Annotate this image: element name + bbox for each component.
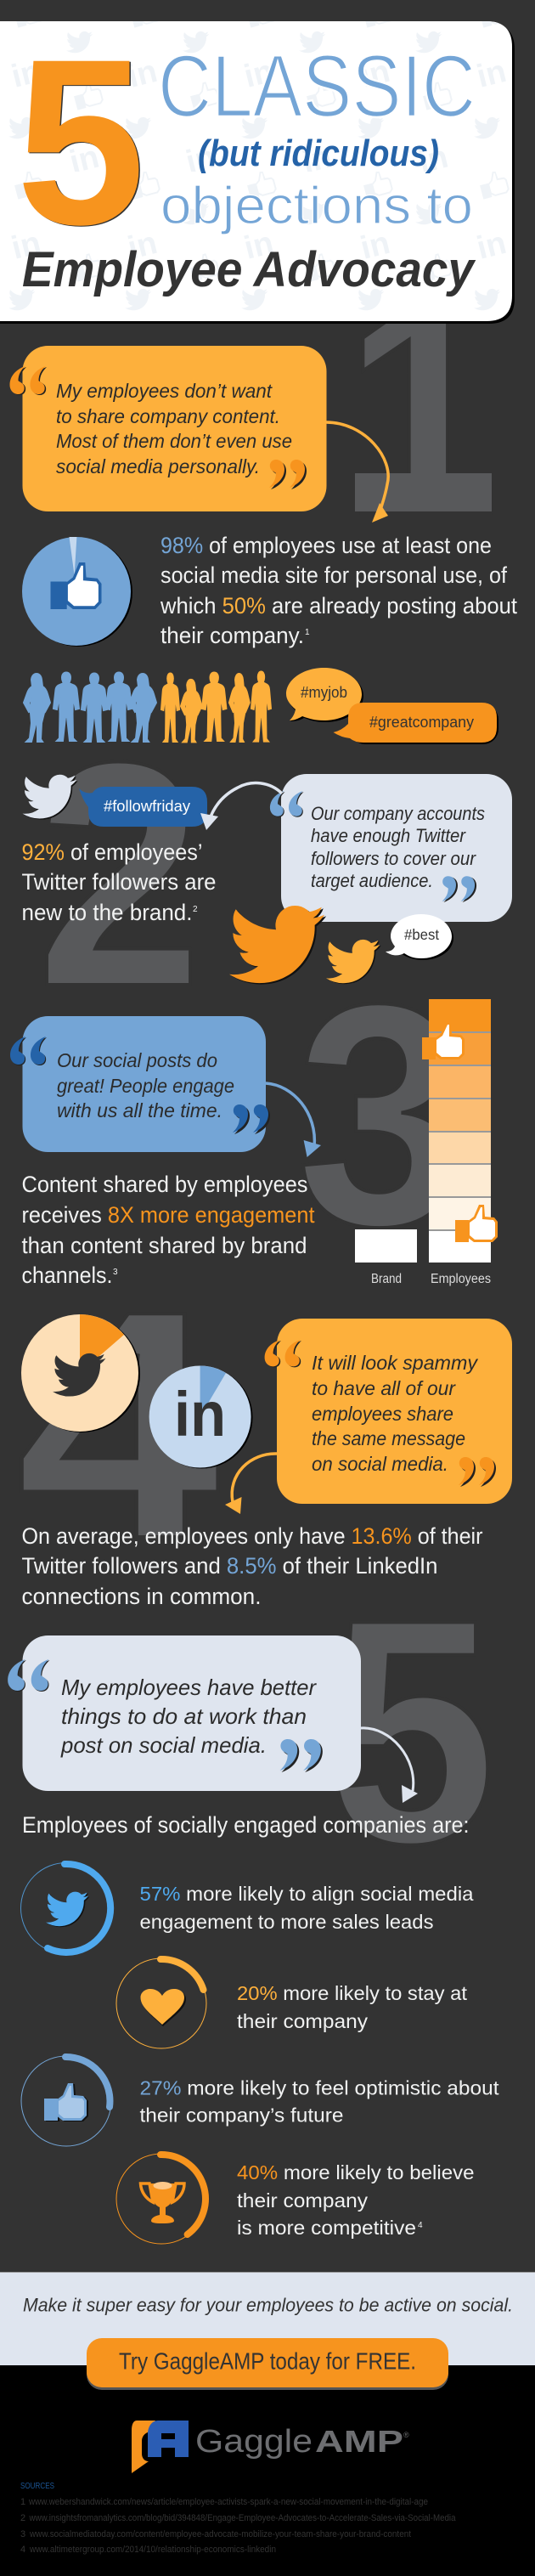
hashtag bubble best <box>386 914 453 960</box>
stat text 13.6%: connections in common. <box>22 1584 262 1609</box>
quote text <box>56 380 292 477</box>
sources <box>20 2481 456 2555</box>
text 40% <box>237 2161 474 2239</box>
sources: 4 <box>20 2545 25 2555</box>
header panel <box>0 9 515 324</box>
opening quote mark <box>270 791 304 817</box>
arrow from bubble 1 <box>326 422 388 523</box>
quote text <box>60 1675 317 1758</box>
stat text 98%: their company. <box>160 623 304 648</box>
closing quote mark <box>459 1457 496 1487</box>
stat text 92%: 2 <box>193 905 198 914</box>
closing quote mark <box>442 876 476 902</box>
section 3 quote bubble <box>10 1016 270 1152</box>
text 27%: 27% more likely to feel optimistic about <box>139 2076 499 2099</box>
text 20% <box>237 1982 467 2032</box>
stat text 8X: channels. <box>22 1263 112 1288</box>
axis label brand: Brand <box>371 1272 402 1286</box>
pie chart: linkedin 8.5% <box>149 1366 253 1468</box>
text 40%: their company <box>237 2189 368 2212</box>
quote text: Most of them don’t even use <box>56 430 292 452</box>
stat text 13.6%: Twitter followers and 8.5% of their LinkedIn <box>22 1553 438 1579</box>
text 57%: 57% more likely to align social media <box>139 1883 474 1905</box>
opening quote mark <box>265 1340 301 1367</box>
stat text 92%: new to the brand. <box>22 900 192 925</box>
sources: www.socialmediatoday.com/content/employee-advocate-mobilize-your-team-share-your-brand-content <box>29 2529 411 2539</box>
section 1 quote bubble <box>10 346 326 511</box>
hashtag bubble best: #best <box>404 926 439 943</box>
sources: www.insightsfromanalytics.com/blog/bid/394848/Engage-Employee-Advocates-to-Accelerate-Sales-via-Social-Media <box>29 2513 456 2523</box>
quote text: post on social media. <box>60 1732 267 1758</box>
quote text: with us all the time. <box>57 1099 222 1121</box>
ring 20% heart <box>116 1958 206 2048</box>
quote text: on social media. <box>312 1453 448 1475</box>
hashtag bubble myjob <box>286 668 363 722</box>
stat text 98%: 98% of employees use at least one <box>160 533 492 558</box>
hashtag bubble followfriday: #followfriday <box>104 797 191 815</box>
hashtag bubble greatcompany: #greatcompany <box>369 714 474 731</box>
CTA sentence: Make it super easy for your employees to be active on social. <box>23 2294 513 2316</box>
ring 40% trophy <box>116 2154 206 2244</box>
quote text: employees share <box>312 1403 453 1425</box>
brand bar <box>355 1229 417 1263</box>
opening quote mark <box>10 366 47 395</box>
big orange 5: 5 <box>16 9 145 274</box>
stat text 8X <box>22 1172 315 1288</box>
stat text 98%: social media site for personal use, of <box>160 562 507 588</box>
big number 5: 5 <box>329 1553 496 1910</box>
icon: thumb on brand top <box>422 1022 465 1059</box>
pie chart: linkedin 8.5%: in <box>174 1379 226 1449</box>
CTA button: Try GaggleAMP today for FREE. <box>119 2348 416 2374</box>
sources: SOURCES <box>20 2481 54 2491</box>
big orange 5: 5 <box>17 10 146 274</box>
ring 57% twitter <box>20 1862 112 1954</box>
quote text <box>312 1352 479 1475</box>
quote text: great! People engage <box>57 1075 234 1097</box>
icon: trophy <box>141 2182 184 2223</box>
stat text 8X: receives 8X more engagement <box>22 1202 315 1228</box>
CTA button <box>87 2338 448 2390</box>
stat text 13.6% <box>22 1523 483 1609</box>
title: Employee Advocacy: Employee Advocacy <box>22 242 476 297</box>
stat text 8X: than content shared by brand <box>22 1233 307 1258</box>
call to action band <box>0 2272 535 2365</box>
quote text: have enough Twitter <box>311 825 467 846</box>
quote text: It will look spammy <box>312 1352 479 1374</box>
quote text <box>57 1049 234 1121</box>
quote text: the same message <box>312 1427 465 1449</box>
text 57%: engagement to more sales leads <box>139 1911 433 1933</box>
employees bar <box>429 999 491 1263</box>
text 27% <box>139 2076 499 2126</box>
stat text 98% <box>160 533 517 648</box>
icon: small orange bird <box>326 940 381 984</box>
big number 4: 4 <box>16 1243 222 1606</box>
black footer background <box>0 2365 535 2576</box>
hashtag bubble myjob: #myjob <box>301 684 347 701</box>
intro line: Employees of socially engaged companies are: <box>22 1812 469 1838</box>
sources: 1 <box>20 2497 25 2507</box>
icon: thumbs up <box>51 562 102 609</box>
stat text 92%: Twitter followers are <box>22 869 216 895</box>
text 40%: is more competitive <box>237 2217 416 2239</box>
quote text: social media personally. <box>56 455 260 477</box>
arrow from bubble 2 <box>200 783 282 830</box>
stat text 8X: Content shared by employees <box>22 1172 307 1197</box>
ring 27% thumb <box>21 2056 111 2146</box>
quote text <box>311 803 485 891</box>
opening quote mark <box>8 1659 49 1692</box>
GaggleAMP logo: AMP <box>315 2424 403 2459</box>
section 5 quote bubble <box>8 1635 361 1791</box>
icon: white twitter bird <box>22 775 78 820</box>
icon: thumb on employees bar <box>455 1205 498 1242</box>
arrow from bubble 3 <box>266 1083 321 1157</box>
title: CLASSIC: CLASSIC <box>158 37 476 136</box>
sources: www.webershandwick.com/news/article/employee-activists-spark-a-new-social-movement-in-the-digital-age <box>28 2497 428 2507</box>
arrow from bubble 4 <box>225 1454 277 1514</box>
hashtag bubble greatcompany <box>333 703 498 744</box>
text 20%: 20% more likely to stay at <box>237 1982 467 2004</box>
stat text 92%: 92% of employees’ <box>22 839 202 865</box>
quote text: My employees don’t want <box>56 380 273 402</box>
big number 2: 2 <box>37 696 202 1053</box>
arrow from bubble 5 <box>361 1728 418 1803</box>
stat text 13.6%: On average, employees only have 13.6% of their <box>22 1523 483 1549</box>
text 40%: 40% more likely to believe <box>237 2161 474 2183</box>
quote text: My employees have better <box>61 1675 317 1700</box>
big number 3: 3 <box>296 938 463 1291</box>
text 27%: their company’s future <box>139 2104 343 2126</box>
quote text: followers to cover our <box>311 848 477 869</box>
stat text 8X: 3 <box>113 1268 118 1277</box>
text 57% <box>139 1883 474 1933</box>
title: objections to: objections to <box>160 177 473 235</box>
big number 1: 1 <box>344 238 499 578</box>
GaggleAMP logo <box>132 2421 409 2473</box>
GaggleAMP logo: Gaggle <box>195 2424 313 2460</box>
text 20%: their company <box>237 2010 368 2032</box>
quote text: target audience. <box>311 870 433 891</box>
opening quote mark <box>10 1037 47 1065</box>
axis label employees: Employees <box>431 1272 491 1286</box>
stat text 98%: 1 <box>305 628 310 637</box>
sources: www.altimetergroup.com/2014/10/relationship-economics-linkedin <box>29 2545 276 2555</box>
pie chart: twitter 13.6% <box>21 1314 140 1432</box>
sources: 2 <box>20 2513 25 2523</box>
closing quote mark <box>269 460 307 489</box>
people silhouettes <box>24 672 271 742</box>
bar chart: brand vs employees <box>355 999 498 1286</box>
text 40%: 4 <box>418 2221 423 2230</box>
stat text 92% <box>22 839 216 925</box>
closing quote mark <box>233 1104 270 1134</box>
pie chart 98% with thumb <box>22 537 132 647</box>
section 2 quote bubble <box>270 774 512 922</box>
sources: 3 <box>20 2529 25 2539</box>
quote text: Our social posts do <box>57 1049 217 1071</box>
quote text: Our company accounts <box>311 803 485 824</box>
quote text: things to do at work than <box>61 1703 307 1729</box>
GaggleAMP logo: ® <box>403 2431 409 2439</box>
title: but ridiculous: (but ridiculous) <box>198 133 439 174</box>
stat text 98%: which 50% are already posting about <box>160 593 517 619</box>
quote text: to have all of our <box>312 1377 456 1399</box>
hashtag bubble followfriday <box>79 787 207 827</box>
icon: large orange bird <box>229 906 326 985</box>
section 4 quote bubble <box>265 1319 512 1504</box>
closing quote mark <box>280 1739 323 1772</box>
quote text: to share company content. <box>56 405 280 427</box>
